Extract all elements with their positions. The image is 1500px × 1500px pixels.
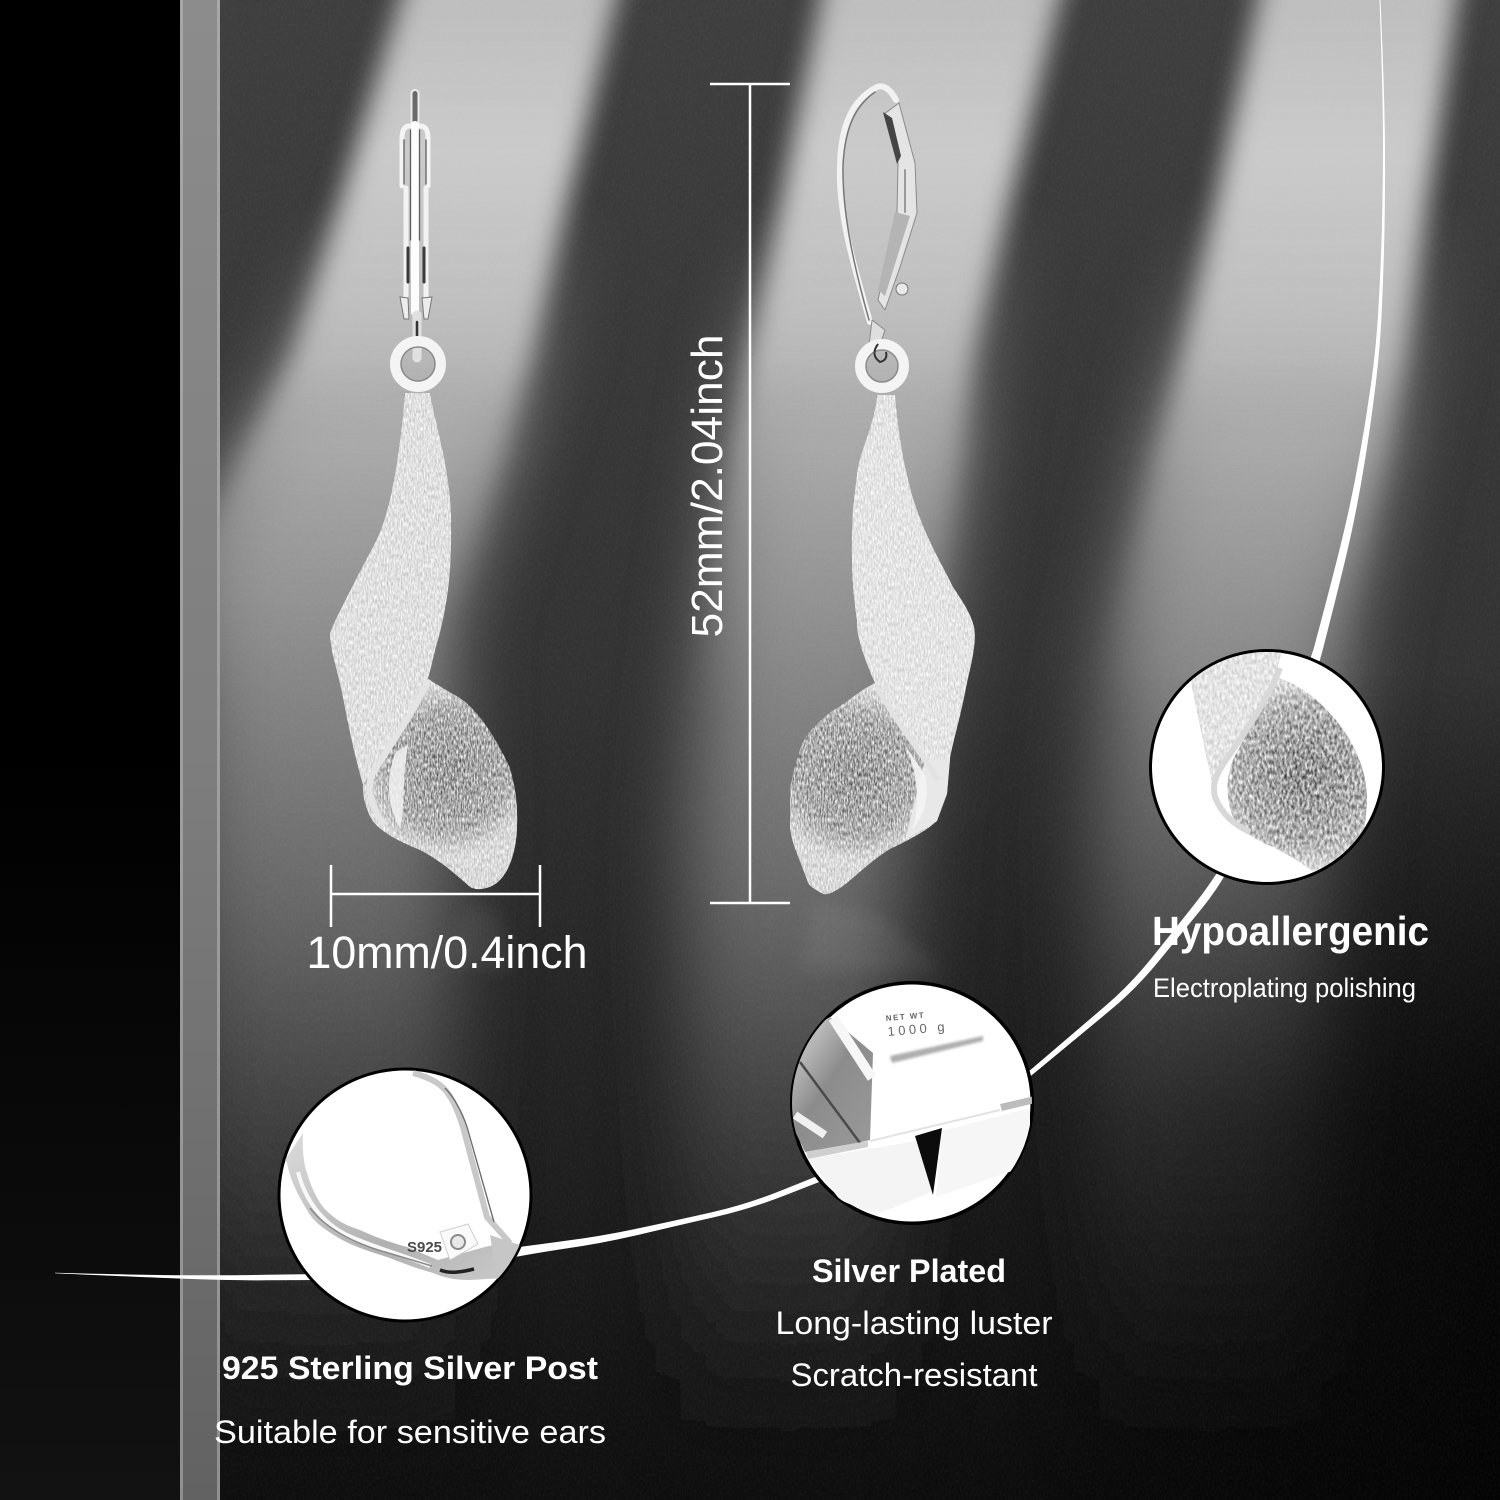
reflections under earrings — [440, 900, 946, 973]
text: scratch: Scratch-resistant — [790, 1357, 1038, 1393]
rear wire edge — [445, 1088, 494, 1222]
right fold rim — [875, 683, 938, 780]
left petal — [363, 679, 517, 889]
lower left bar — [808, 1141, 932, 1215]
heading: sterling: 925 Sterling Silver Post — [222, 1350, 598, 1386]
bar ledge left — [806, 1141, 868, 1159]
heading: silver plated: Silver Plated — [812, 1253, 1006, 1289]
right earring — [790, 86, 975, 894]
right petal — [790, 683, 938, 894]
background: black left band — [0, 0, 180, 1500]
text: long-lasting: Long-lasting luster — [776, 1305, 1053, 1341]
left jump ring — [396, 342, 440, 386]
right lever hook — [840, 86, 917, 345]
dark hinge slot — [440, 1269, 474, 1272]
text: electroplating: Electroplating polishing — [1153, 973, 1416, 1003]
arc line connecting callouts — [55, 0, 1385, 1280]
screw — [451, 1235, 465, 1249]
post pad — [440, 1224, 478, 1260]
detail petal — [1228, 678, 1367, 875]
height label: 52mm/2.04inch — [683, 334, 732, 638]
callout circle: hypoallergenic detail — [1149, 640, 1385, 885]
left twist front — [330, 393, 451, 785]
right twist front — [852, 395, 975, 794]
width label: 10mm/0.4inch — [306, 927, 588, 978]
right jump ring — [860, 344, 904, 388]
left fold highlight — [389, 745, 408, 828]
right fold highlight — [905, 745, 927, 830]
width dimension — [331, 865, 540, 927]
left earring — [330, 90, 517, 889]
height dimension — [710, 84, 790, 903]
left fold rim — [370, 679, 428, 825]
rear wire — [413, 1073, 510, 1243]
detail front band — [1191, 652, 1282, 782]
detail fold rim — [1214, 668, 1280, 832]
upper bar front edge — [870, 1110, 1000, 1141]
left lever hook — [400, 90, 432, 358]
callout circle: silver bar — [780, 981, 1035, 1225]
text: sensitive: Suitable for sensitive ears — [214, 1414, 606, 1450]
callout circle: S925 post — [278, 1068, 532, 1322]
heading: Hypoallergenic: Hypoallergenic — [1152, 908, 1429, 954]
bar weight value: 1000 g — [887, 1019, 945, 1039]
right fold base — [905, 759, 950, 840]
hoop wire band — [285, 1133, 515, 1280]
wedge gap — [915, 1128, 942, 1195]
bar engraved stripe — [890, 1036, 983, 1063]
lower right bar — [936, 1108, 1030, 1197]
background: vertical metal strip — [180, 0, 220, 1500]
hoop dark line — [310, 1208, 432, 1266]
hoop highlight — [298, 1172, 430, 1266]
hinge end — [490, 1235, 520, 1285]
bar ledge right — [1000, 1096, 1032, 1111]
grey bar behind — [792, 1017, 873, 1152]
bar weight text: NET WT — [885, 1011, 924, 1023]
S925 stamp: S925 — [407, 1239, 442, 1256]
